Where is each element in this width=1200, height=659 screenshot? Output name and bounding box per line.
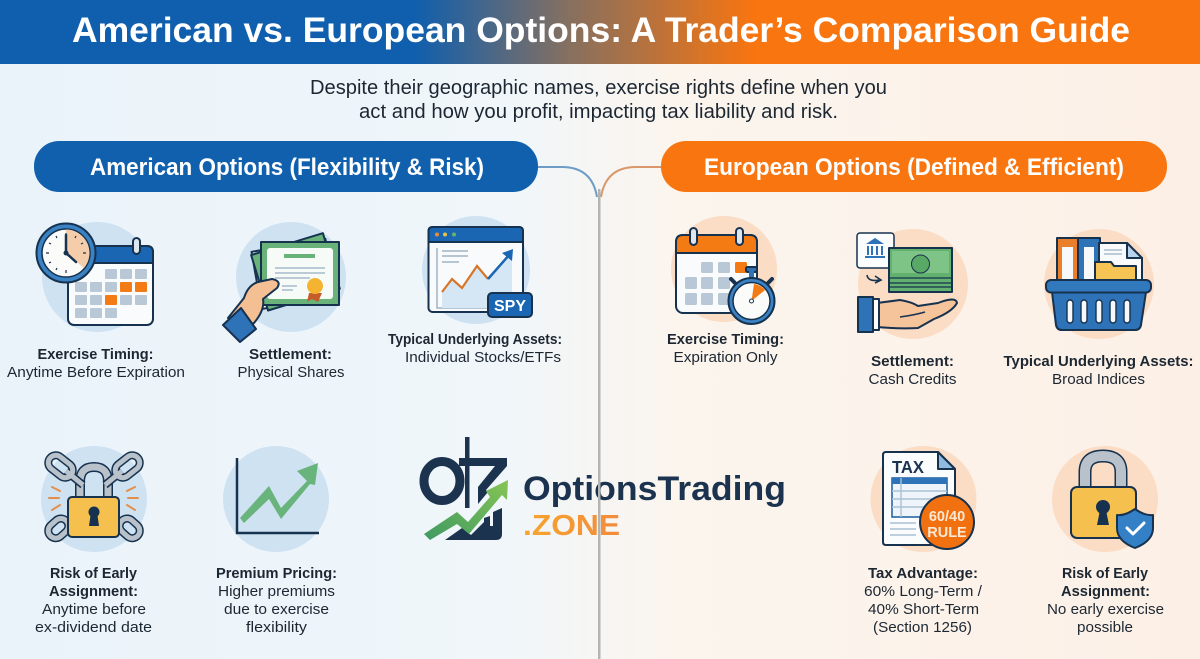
card: American settlement — [223, 222, 346, 381]
label: Risk of Early — [50, 565, 138, 582]
label — [1004, 353, 1194, 388]
label: 40% Short-Term — [868, 601, 979, 618]
card: American premium pricing — [216, 446, 337, 636]
icon: calendar and stopwatch — [671, 216, 777, 324]
label: Typical Underlying Assets: — [1004, 353, 1194, 370]
label: ex-dividend date — [35, 619, 152, 636]
label: Exercise Timing: — [38, 346, 154, 363]
label — [868, 353, 956, 388]
label — [7, 346, 185, 381]
icon: basket of assets — [1044, 229, 1154, 339]
panel heading: American options — [34, 141, 538, 192]
label: No early exercise — [1047, 601, 1164, 618]
label: Individual Stocks/ETFs — [405, 349, 561, 366]
icon: tax form with 60/40 rule badge: RULE — [927, 525, 967, 541]
panel heading: European options — [661, 141, 1167, 192]
label: possible — [1077, 619, 1133, 636]
label: Tax Advantage: — [868, 565, 978, 582]
logo mark — [424, 437, 508, 540]
icon: clock and calendar — [36, 222, 153, 332]
label — [35, 565, 152, 636]
connector: european heading to divider — [601, 167, 661, 197]
icon: rising price chart — [223, 446, 329, 552]
subtitle — [310, 77, 887, 123]
label: Anytime Before Expiration — [7, 364, 185, 381]
subtitle: act and how you profit, impacting tax liability and risk. — [359, 101, 838, 123]
center divider — [598, 189, 600, 659]
logo wordmark: OptionsTrading — [523, 470, 786, 508]
label: 60% Long-Term / — [864, 583, 983, 600]
card: European exercise timing — [667, 216, 784, 366]
title: American vs. European Options: A Trader’s Comparison Guide — [72, 11, 1130, 50]
icon: hand holding share certificates — [223, 222, 346, 342]
label — [864, 565, 983, 636]
label — [1047, 565, 1164, 636]
label: Anytime before — [42, 601, 146, 618]
connector: american heading to divider — [538, 167, 597, 197]
label: Physical Shares — [238, 364, 344, 381]
label: flexibility — [246, 619, 308, 636]
icon: tax form with 60/40 rule badge: TAX — [892, 457, 924, 477]
icon: padlock with chains — [41, 446, 147, 552]
logo: OptionsTrading.ZONE — [424, 437, 786, 542]
label: (Section 1256) — [873, 619, 972, 636]
panel heading: American options: American Options (Flexibility & Risk) — [90, 154, 484, 181]
card: European underlying assets — [1004, 229, 1194, 388]
icon: tax form with 60/40 rule badge: 60/40 — [929, 509, 965, 525]
logo .zone: .ZONE — [523, 510, 620, 542]
label — [238, 346, 344, 381]
panel heading: European options: European Options (Defined & Efficient) — [704, 154, 1124, 181]
card: European early assignment risk — [1047, 446, 1164, 636]
label: Expiration Only — [674, 349, 778, 366]
card: American early assignment risk — [35, 446, 152, 636]
label: Settlement: — [249, 346, 332, 363]
subtitle: Despite their geographic names, exercise rights define when you — [310, 77, 887, 99]
label: Typical Underlying Assets: — [388, 331, 562, 348]
icon: padlock with shield — [1052, 446, 1158, 552]
icon: SPY chart window: SPY — [494, 298, 526, 315]
card: American underlying assets — [388, 216, 562, 366]
title banner — [0, 0, 1200, 64]
label — [388, 331, 562, 366]
label — [216, 565, 337, 636]
label: Assignment: — [1061, 583, 1150, 600]
icon: bank, cash and open hand — [857, 229, 968, 339]
label — [667, 331, 784, 366]
icon: SPY chart window — [422, 216, 532, 324]
label: Higher premiums — [218, 583, 335, 600]
card: American exercise timing — [7, 222, 185, 381]
card: European tax advantage — [864, 446, 983, 636]
label: Settlement: — [871, 353, 954, 370]
label: Assignment: — [49, 583, 138, 600]
label: Risk of Early — [1062, 565, 1149, 582]
label: due to exercise — [224, 601, 329, 618]
label: Cash Credits — [868, 371, 956, 388]
label: Broad Indices — [1052, 371, 1145, 388]
label: Exercise Timing: — [667, 331, 784, 348]
label: Premium Pricing: — [216, 565, 337, 582]
icon: tax form with 60/40 rule badge — [870, 446, 976, 552]
card: European settlement — [857, 229, 968, 388]
